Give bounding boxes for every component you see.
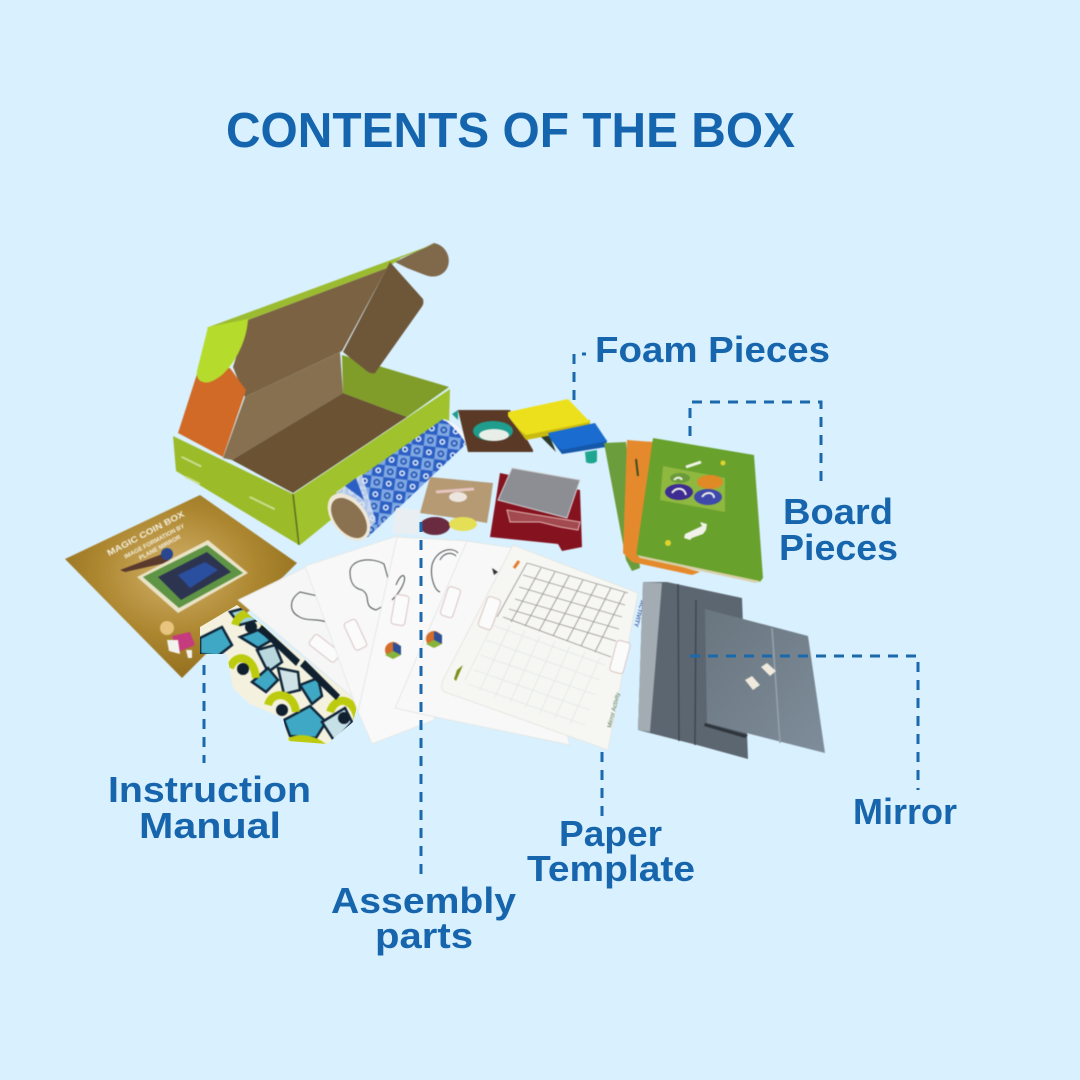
right interior: [342, 355, 449, 417]
paper template label: [527, 752, 695, 889]
sheet label: [308, 633, 341, 663]
manual title: MAGIC COIN BOX: [105, 509, 186, 558]
paper template label: Template: [527, 848, 695, 889]
assembly parts label: [331, 522, 516, 956]
instruction manual label: [108, 665, 311, 846]
back board: [604, 442, 640, 571]
lime flap: [197, 319, 248, 383]
paper template label: Paper: [559, 813, 662, 854]
lid side flap: [343, 262, 423, 373]
mandala paper: [200, 605, 356, 744]
mirror label: [690, 656, 957, 832]
wrench cut-out: [684, 522, 707, 540]
yellow foam: [508, 416, 590, 440]
board pieces label: Board: [783, 491, 893, 532]
manual title: IMAGE FORMATION BY: [124, 524, 186, 560]
instruction manual label: Manual: [139, 805, 281, 846]
manual cartoon character: [160, 621, 195, 658]
blue foam: [548, 436, 607, 454]
manual cover picture: [120, 540, 248, 613]
box: [173, 243, 450, 545]
mirror slots: [761, 663, 776, 676]
front board: [637, 438, 763, 582]
teal foam: [585, 450, 597, 463]
manual title: [105, 509, 195, 574]
board centre panel: [660, 466, 725, 512]
foam pieces label: [574, 329, 830, 400]
mirror label: Mirror: [853, 791, 957, 832]
mirror sheets: [638, 582, 825, 759]
sheet three: [358, 537, 470, 744]
instruction manual label: Instruction: [108, 769, 311, 810]
red acrylic: [490, 473, 582, 551]
board pieces: [604, 438, 763, 583]
wooden piece: [420, 477, 493, 523]
board pieces label: Pieces: [779, 527, 898, 568]
back mirror: [638, 582, 748, 759]
instruction manual booklet: [65, 495, 297, 678]
lid outer strip: [206, 243, 437, 328]
board pieces label: [690, 402, 898, 568]
sheet two: [305, 535, 400, 744]
orange flap: [178, 368, 246, 457]
front panel: [173, 436, 299, 545]
back wall: [223, 352, 343, 460]
title: CONTENTS OF THE BOX: [226, 104, 795, 158]
brown foam: [458, 410, 533, 452]
lid tab: [395, 243, 449, 277]
small red parts: [420, 517, 450, 535]
assembly parts: [392, 468, 582, 551]
lid inner brown: [233, 268, 387, 397]
small yellow parts: [449, 517, 477, 531]
sheet four: [395, 541, 570, 745]
right panel: [293, 389, 450, 545]
front activity sheet: ACTIVITY: [632, 599, 645, 627]
upper grid: [497, 563, 628, 657]
sheet one: [238, 566, 384, 702]
front activity sheet: [442, 545, 645, 750]
front panel text: [181, 456, 275, 510]
plastic bag: [392, 508, 420, 535]
logo cube: [385, 642, 401, 659]
grey acrylic: [498, 468, 580, 518]
assembly parts label: Assembly: [331, 880, 516, 921]
front activity sheet: Mirror Activity: [607, 692, 622, 728]
orange board: [623, 440, 700, 575]
grid labels: [477, 596, 502, 631]
assembly parts label: parts: [375, 915, 473, 956]
paper templates fan: [238, 535, 645, 750]
manual title: PLANE MIRROR: [138, 534, 183, 562]
floor: [232, 393, 407, 493]
lower grid: [465, 620, 605, 725]
kaleidoscope tube: [319, 419, 466, 549]
front mirror: [705, 609, 825, 753]
foam pieces: [452, 399, 607, 463]
foam pieces label: Foam Pieces: [595, 329, 830, 370]
